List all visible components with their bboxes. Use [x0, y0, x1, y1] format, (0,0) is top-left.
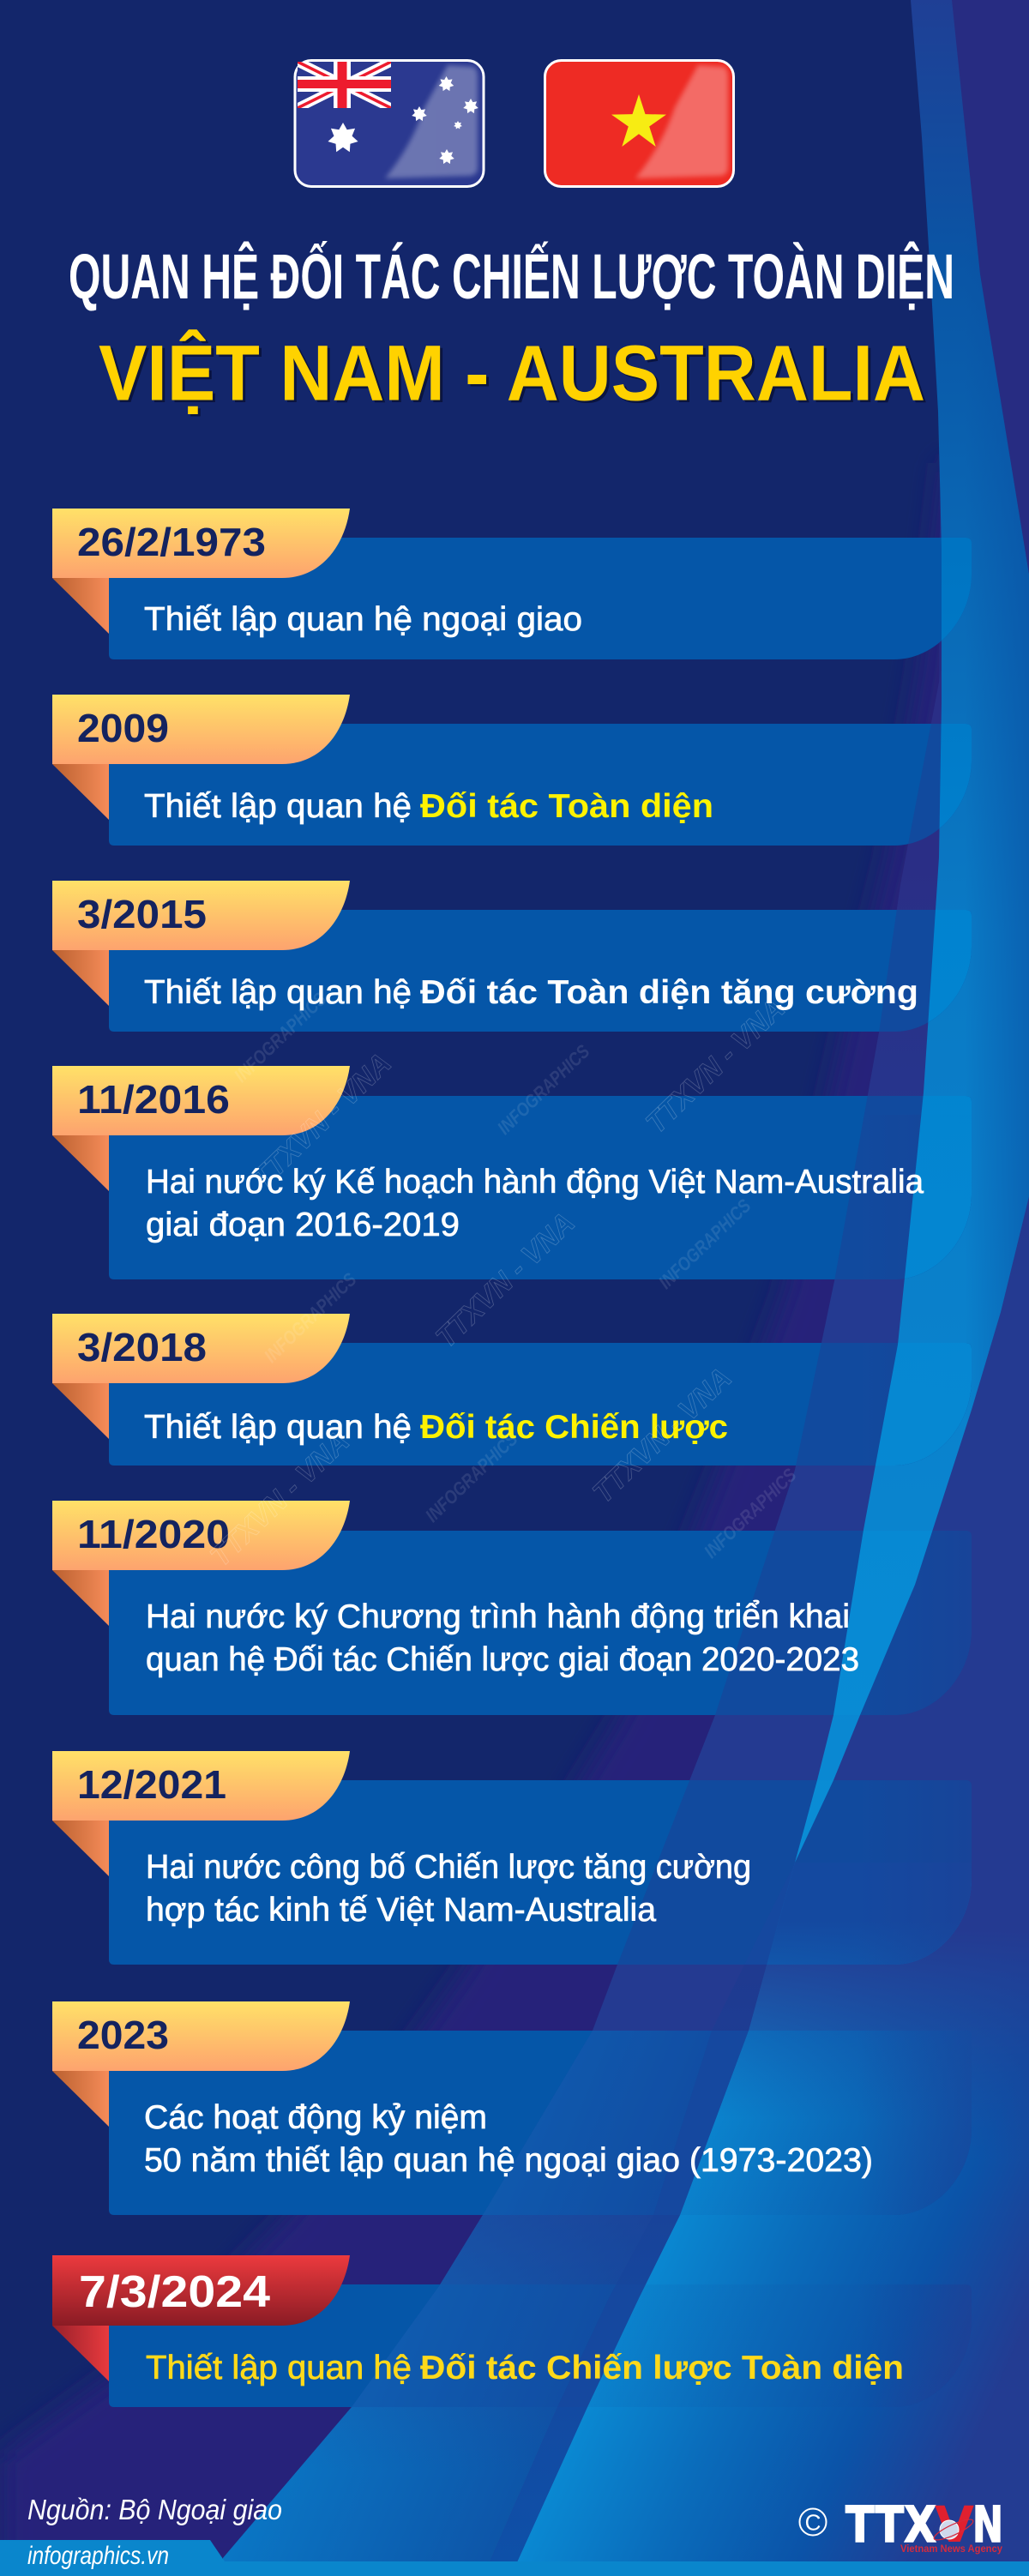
- watermarks: INFOGRAPHICS: [421, 1428, 522, 1526]
- description: [144, 2099, 873, 2179]
- timeline row: 2009: [52, 695, 713, 825]
- flag: Vietnam: [545, 60, 734, 187]
- panel: 3/2018: [109, 1343, 972, 1466]
- ribbon fold: [52, 2071, 109, 2127]
- description: Thiết lập quan hệ ngoại giao: [144, 601, 582, 638]
- watermarks: TTXVN - VNA: [246, 1047, 398, 1195]
- flag: Australia: [295, 60, 484, 187]
- date: 2009: [77, 706, 169, 750]
- logo: TTXVN: TTX: [845, 2495, 936, 2554]
- timeline row: 26/2/1973: [52, 509, 582, 638]
- watermarks: INFOGRAPHICS: [700, 1464, 801, 1562]
- logo: TTXVN: [845, 2495, 1003, 2555]
- ribbon fold: [52, 764, 109, 820]
- description: Thiết lập quan hệ: [144, 974, 412, 1011]
- ribbon fold: [52, 950, 109, 1006]
- description: Đối tác Toàn diện tăng cường: [420, 974, 918, 1011]
- ribbon fold: [52, 1383, 109, 1439]
- glare: [635, 65, 728, 178]
- panel: 7/3/2024: [109, 2284, 972, 2407]
- date tag: [52, 2255, 350, 2326]
- description: [146, 2350, 904, 2386]
- date tag: [52, 1314, 350, 1383]
- date: 11/2016: [77, 1077, 230, 1122]
- timeline row: 11/2020: [52, 1501, 859, 1678]
- watermarks: INFOGRAPHICS: [230, 988, 331, 1086]
- panel: 11/2020: [109, 1531, 972, 1715]
- timeline row: 7/3/2024: [52, 2255, 904, 2386]
- timeline row: 3/2015: [52, 881, 918, 1011]
- logo: TTXVN: V: [935, 2495, 974, 2554]
- date tag: [52, 1066, 350, 1135]
- description: Hai nước ký Chương trình hành động triển khai: [146, 1598, 850, 1635]
- description: Thiết lập quan hệ: [144, 1409, 412, 1446]
- description: Hai nước công bố Chiến lược tăng cường: [146, 1849, 751, 1886]
- date tag: [52, 1751, 350, 1821]
- description: [144, 788, 713, 825]
- website credit: infographics.vn: [27, 2542, 169, 2570]
- ribbon fold: [52, 1570, 109, 1626]
- copyright symbol: C: [805, 2509, 821, 2535]
- panel: 12/2021: [109, 1780, 972, 1965]
- watermarks: INFOGRAPHICS: [654, 1195, 755, 1293]
- ribbon fold: [52, 1821, 109, 1876]
- description: [144, 1409, 728, 1446]
- watermarks: TTXVN - VNA: [430, 1207, 581, 1354]
- description: Đối tác Chiến lược Toàn diện: [420, 2350, 904, 2386]
- description: Đối tác Toàn diện: [420, 788, 713, 825]
- source credit: Nguồn: Bộ Ngoại giao: [27, 2494, 282, 2525]
- watermarks: INFOGRAPHICS: [493, 1040, 594, 1139]
- ribbon fold: [52, 578, 109, 634]
- translucent band tint on panels: [352, 538, 972, 2407]
- agency name: Vietnam News Agency: [900, 2544, 1003, 2555]
- date tag: [52, 881, 350, 950]
- title line 2: VIỆT NAM - AUSTRALIA: [99, 329, 925, 417]
- ribbon fold: [52, 2326, 109, 2381]
- description: Thiết lập quan hệ: [146, 2350, 412, 2386]
- description: 50 năm thiết lập quan hệ ngoại giao (1973-2023): [144, 2142, 873, 2179]
- timeline panels: [109, 538, 972, 2407]
- title line 2: VIỆT NAM - AUSTRALIA: [101, 331, 928, 419]
- description: hợp tác kinh tế Việt Nam-Australia: [146, 1892, 656, 1929]
- description: [146, 1598, 859, 1678]
- date: 7/3/2024: [79, 2267, 270, 2317]
- ribbon fold: [52, 1135, 109, 1191]
- description: Các hoạt động kỷ niệm: [144, 2099, 487, 2136]
- description: Đối tác Chiến lược: [420, 1409, 728, 1446]
- timeline row: 12/2021: [52, 1751, 751, 1929]
- watermarks: TTXVN - VNA: [204, 1425, 356, 1573]
- timeline row: 3/2018: [52, 1314, 728, 1446]
- copyright symbol: [799, 2509, 827, 2535]
- date: 2023: [77, 2013, 169, 2057]
- description: [146, 1849, 751, 1929]
- date: 26/2/1973: [77, 520, 266, 564]
- date: 3/2015: [77, 892, 207, 936]
- date: 11/2020: [77, 1512, 230, 1556]
- date: 3/2018: [77, 1325, 207, 1369]
- date tag: [52, 2001, 350, 2071]
- description: quan hệ Đối tác Chiến lược giai đoạn 2020-2023: [146, 1641, 859, 1678]
- watermarks: TTXVN - VNA: [640, 992, 791, 1140]
- panel: 26/2/1973: [109, 538, 972, 659]
- panel: 2009: [109, 724, 972, 846]
- date tag: [52, 695, 350, 764]
- description: Thiết lập quan hệ: [144, 788, 412, 825]
- description: giai đoạn 2016-2019: [146, 1207, 460, 1243]
- glare: [385, 65, 478, 178]
- panel: 2023: [109, 2031, 972, 2215]
- date tag: [52, 509, 350, 578]
- date: 12/2021: [77, 1762, 226, 1807]
- description: [144, 974, 918, 1011]
- description: Hai nước ký Kế hoạch hành động Việt Nam-Australia: [146, 1164, 924, 1201]
- watermarks: [204, 988, 801, 1573]
- timeline row: 2023: [52, 2001, 873, 2179]
- timeline row: 11/2016: [52, 1066, 924, 1243]
- union jack: [298, 62, 391, 108]
- watermarks: INFOGRAPHICS: [260, 1268, 361, 1367]
- panel: 11/2016: [109, 1096, 972, 1279]
- logo: TTXVN: N: [972, 2495, 1003, 2554]
- description: [146, 1164, 924, 1243]
- date tag: [52, 1501, 350, 1570]
- watermarks: TTXVN - VNA: [587, 1362, 738, 1509]
- globe: [940, 2520, 959, 2539]
- panel: 3/2015: [109, 910, 972, 1032]
